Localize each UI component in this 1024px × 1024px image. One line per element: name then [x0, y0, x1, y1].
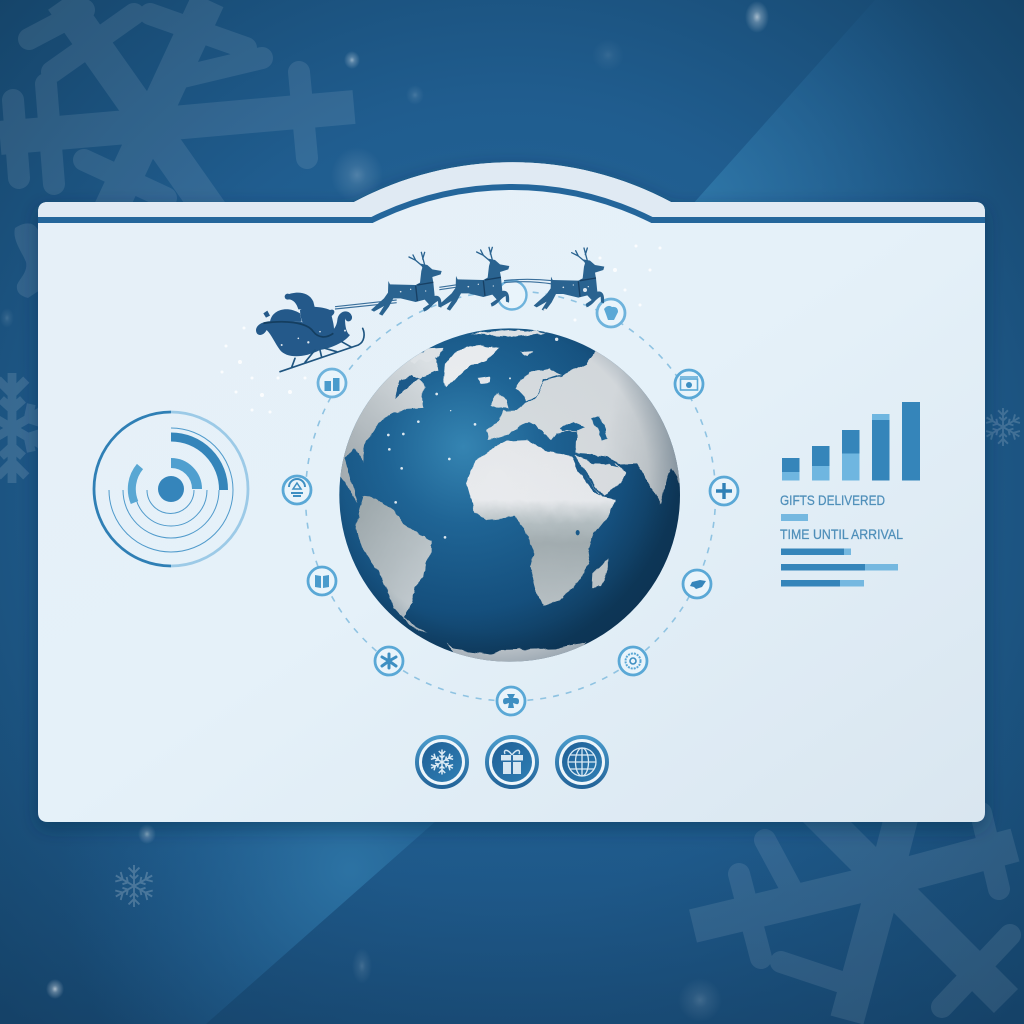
reindeer 2	[439, 247, 509, 311]
icon node: card	[675, 370, 703, 398]
gauge outer ring	[94, 412, 171, 566]
node icons ring	[283, 280, 738, 715]
button: gift	[487, 737, 537, 787]
radial gauge	[94, 412, 248, 566]
icon node: flower	[375, 647, 403, 675]
icon node: gifts	[318, 369, 346, 397]
land: arabia	[575, 455, 627, 497]
sparkles on globe	[387, 338, 558, 539]
gauge arc outer	[171, 437, 224, 490]
icon node: emblem	[283, 476, 311, 504]
snowflake: large top left	[0, 0, 354, 311]
land: scandinavia	[515, 368, 561, 401]
land: arctic islands	[423, 348, 444, 358]
continents	[340, 330, 680, 662]
reins	[335, 279, 553, 309]
reindeer 3	[534, 248, 604, 311]
gauge thin arcs	[109, 428, 233, 552]
label: time until arrival: TIME UNTIL ARRIVAL	[780, 527, 903, 542]
gifts progress bar	[781, 514, 808, 521]
water: black sea	[560, 422, 584, 432]
water: caspian	[593, 417, 608, 440]
orbit path	[306, 291, 716, 701]
land: iceland	[477, 376, 490, 383]
water: persian gulf	[604, 456, 619, 468]
icon node: top	[498, 280, 526, 310]
snowflake: left edge	[0, 373, 67, 483]
water: hudson bay	[395, 375, 421, 398]
button: globe	[557, 737, 607, 787]
land: north america	[330, 352, 438, 503]
globe	[330, 328, 697, 673]
sleigh and reindeer	[256, 247, 604, 372]
icon node: cloud	[597, 299, 625, 327]
reindeer 1	[371, 252, 442, 316]
gauge arc middle	[171, 463, 197, 489]
icon node: plus	[710, 477, 738, 505]
panel	[38, 162, 985, 822]
button: snowflake	[417, 737, 467, 787]
land: madagascar	[593, 558, 608, 587]
icon node: book	[308, 567, 336, 595]
snowflake: small bottom left	[113, 865, 155, 907]
panel header stripe	[38, 187, 985, 220]
snow blob: left edge	[14, 223, 40, 298]
gauge arc left	[132, 466, 140, 502]
land: arctic cap	[470, 329, 547, 337]
icon node: gear	[619, 647, 647, 675]
sparkle trail	[220, 244, 662, 414]
sleigh	[256, 293, 364, 372]
gauge center	[158, 476, 184, 502]
globe shading	[339, 328, 680, 662]
land: africa	[466, 441, 615, 606]
land: antarctica	[447, 642, 587, 673]
snowflake: right edge	[984, 408, 1022, 446]
bokeh lights	[0, 1, 769, 1022]
icon node: bird	[683, 570, 711, 598]
land: eurasia	[487, 347, 697, 505]
land: svalbard	[520, 351, 533, 357]
land: south america	[357, 497, 432, 633]
land: greenland	[443, 345, 500, 387]
snowflake: large bottom right	[693, 745, 1015, 1020]
bar chart	[782, 402, 920, 480]
icon node: propeller	[497, 687, 525, 715]
water: red sea	[573, 457, 600, 496]
santa	[300, 307, 334, 338]
progress bars	[781, 548, 898, 586]
water: lake victoria	[576, 530, 580, 535]
land: uk	[490, 393, 509, 409]
label: gifts delivered: GIFTS DELIVERED	[780, 493, 885, 508]
